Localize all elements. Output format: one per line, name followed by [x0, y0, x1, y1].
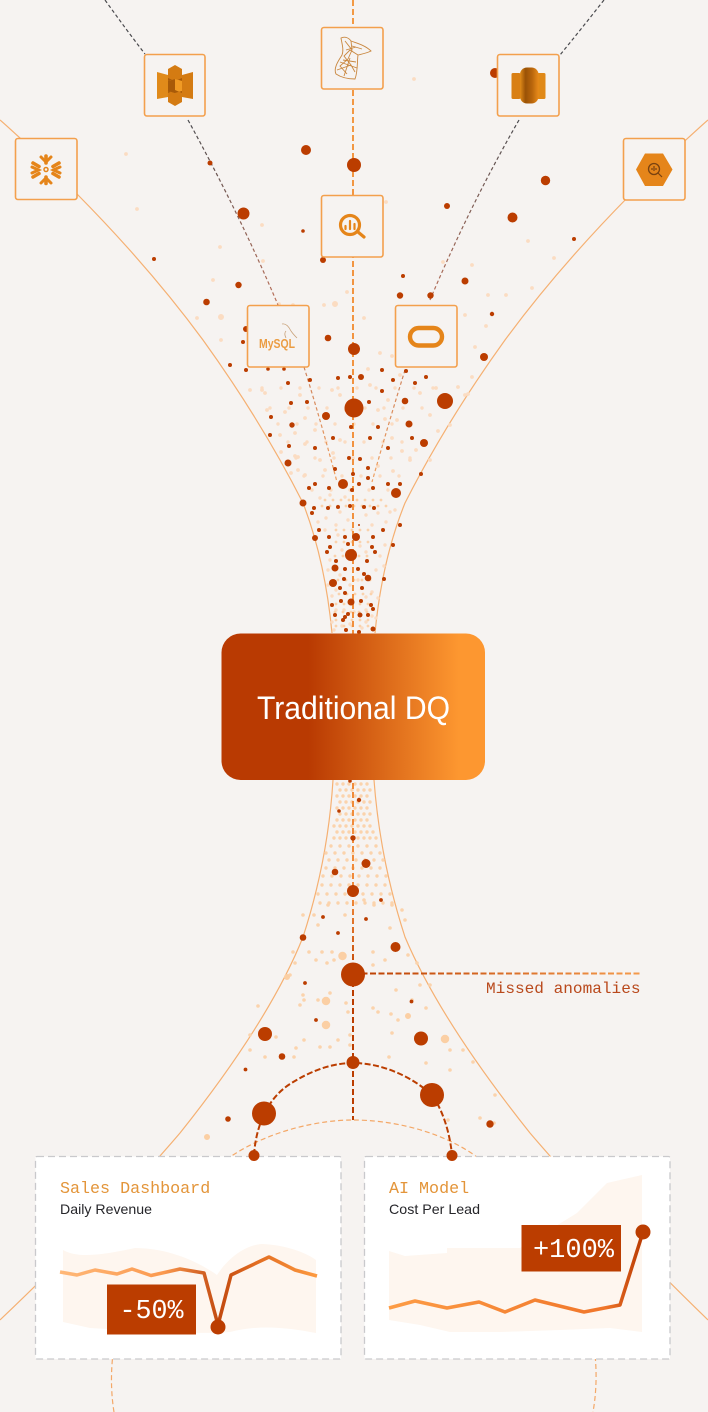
light particles: bottom funnel	[207, 784, 495, 1137]
card subtitle: Cost Per Lead	[389, 1201, 480, 1217]
card subtitle: Daily Revenue	[60, 1201, 152, 1217]
badge: +100%: +100%	[533, 1236, 615, 1266]
badge: +100%	[522, 1225, 621, 1272]
icon: Amazon Redshift	[498, 54, 559, 116]
icon: MySQL	[248, 306, 309, 367]
central box: Traditional DQ	[222, 634, 485, 780]
icon: SQL Server	[322, 28, 383, 89]
icon: MySQL: MySQL	[259, 336, 295, 351]
icon: Amazon S3	[144, 54, 205, 116]
badge: -50%	[107, 1284, 196, 1334]
lower dashed arc	[111, 1120, 596, 1412]
central box: Traditional DQ: Traditional DQ	[257, 690, 450, 726]
chart end dot	[210, 1320, 226, 1334]
chart line	[389, 1232, 643, 1312]
icon: Oracle	[396, 306, 457, 367]
chart end dot	[636, 1224, 650, 1240]
card: Sales Dashboard	[36, 1156, 341, 1359]
card title: Sales Dashboard	[60, 1180, 210, 1199]
badge: -50%: -50%	[119, 1297, 185, 1327]
card title: AI Model	[389, 1180, 469, 1199]
particles: dark dots	[152, 68, 576, 1128]
chart area band	[389, 1175, 642, 1332]
card: AI Model	[364, 1156, 670, 1359]
annotation: missed anomalies line	[353, 972, 641, 974]
connectors: dashed source lines	[105, 0, 604, 482]
annotation: missed anomalies label: Missed anomalies	[486, 980, 641, 998]
funnel outline: bottom	[0, 780, 708, 1320]
dark arc with nodes	[248, 962, 458, 1161]
funnel outline: top	[0, 120, 708, 633]
icon: BigQuery magnifier	[322, 196, 383, 257]
connector: center vertical dashed line	[352, 0, 354, 1120]
chart area band	[63, 1244, 316, 1333]
light particles: top funnel	[126, 79, 554, 630]
icon: BigQuery hexagon	[624, 138, 685, 200]
chart line	[60, 1257, 317, 1325]
icon: Snowflake	[16, 138, 77, 200]
